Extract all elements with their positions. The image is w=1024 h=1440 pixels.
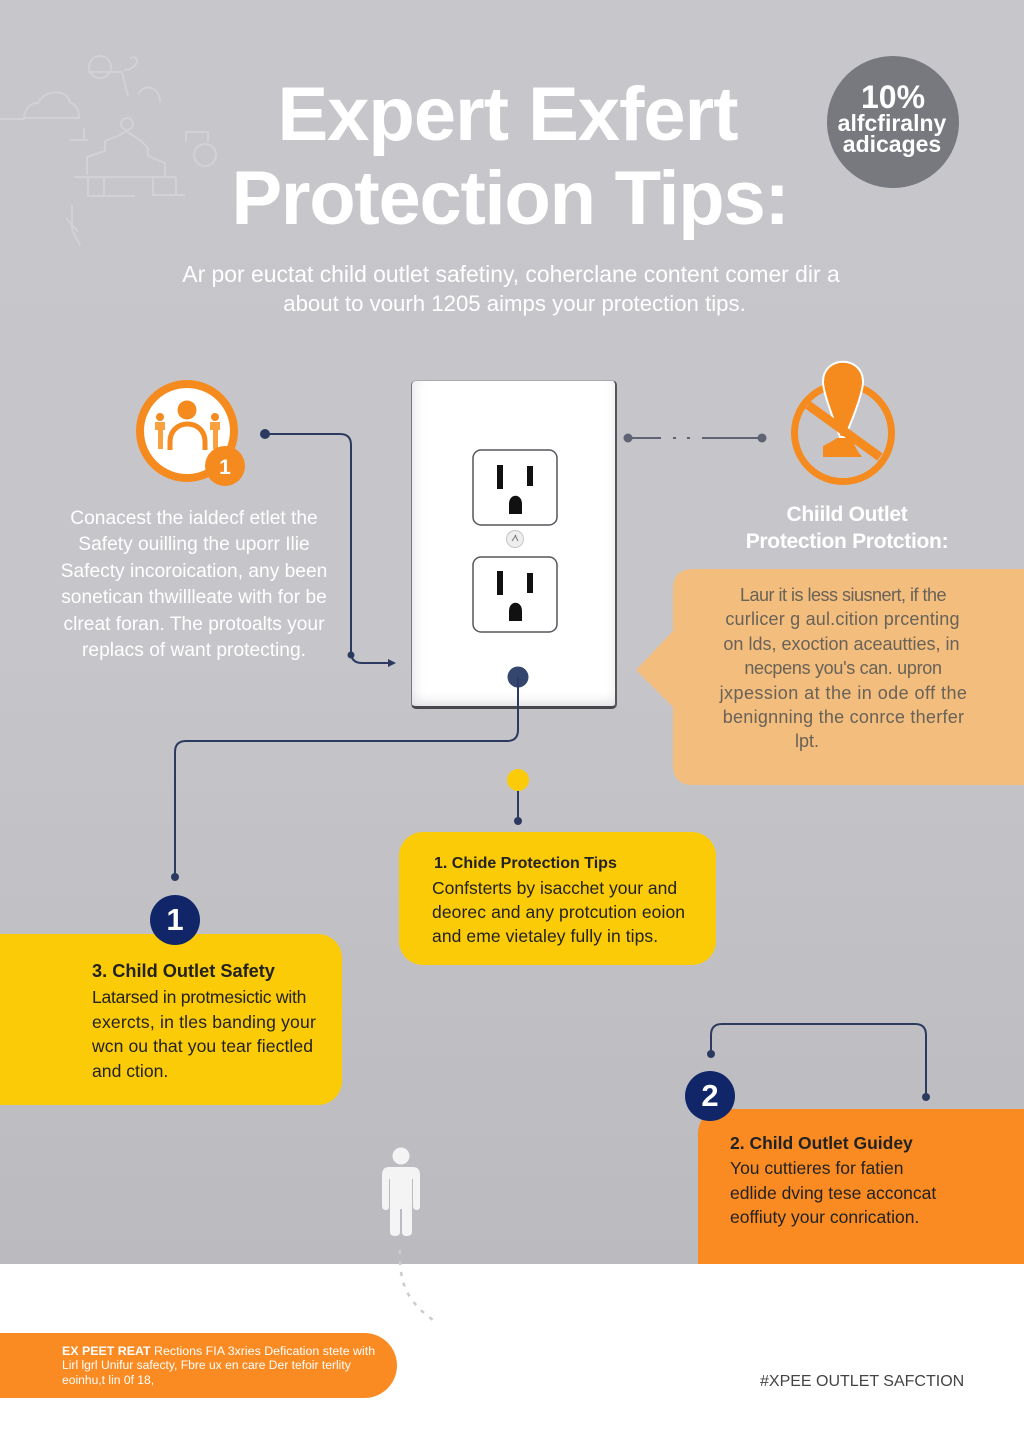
callout: right orange panel: Laur it is less siusnert, if the bbox=[740, 585, 946, 605]
card: chide protection tips: 1. Chide Protection Tips bbox=[434, 855, 617, 872]
connector: outlet to right icon bbox=[624, 434, 766, 442]
card: child outlet guidey: 2. Child Outlet Guidey bbox=[730, 1133, 913, 1153]
card: chide protection tips: Confsterts by isacchet your and bbox=[432, 878, 677, 898]
connector: icon to outlet bbox=[260, 429, 396, 667]
outlet wall plate bbox=[411, 380, 617, 709]
callout: right orange panel bbox=[636, 569, 1024, 785]
heading: right panel: Chiild Outlet bbox=[787, 503, 907, 526]
card: chide protection tips bbox=[399, 832, 716, 965]
title: Expert Exfert bbox=[277, 72, 738, 157]
badge: number 2 bbox=[685, 1071, 735, 1121]
text block: left description bbox=[61, 508, 327, 661]
badge: number 1 bbox=[150, 895, 200, 945]
card: child outlet guidey: edlide dving tese acconcat bbox=[730, 1183, 936, 1203]
badge: number 1: 1 bbox=[166, 902, 184, 937]
icon: people in orange circle: 1 bbox=[219, 456, 231, 479]
text block: left description: Conacest the ialdecf etlet the bbox=[70, 508, 318, 529]
card: child outlet guidey: You cuttieres for fatien bbox=[730, 1158, 904, 1178]
upper socket bbox=[472, 449, 558, 526]
connector: yellow dot to card bbox=[507, 769, 529, 825]
text block: left description: Safecty incoroication, any been bbox=[61, 561, 327, 582]
badge: stat circle: alfcfiralny bbox=[838, 110, 946, 136]
screw bbox=[506, 530, 524, 548]
card: child outlet safety: 3. Child Outlet Safety bbox=[92, 961, 275, 981]
text block: left description: replacs of want protecting. bbox=[82, 640, 306, 661]
card: child outlet guidey bbox=[698, 1109, 1024, 1264]
connector: step 2 bracket bbox=[707, 1023, 930, 1101]
heading: right panel bbox=[746, 503, 948, 553]
subtitle: about to vourh 1205 aimps your protection tips. bbox=[283, 291, 746, 316]
callout: right orange panel: necpens you's can. upron bbox=[744, 658, 942, 678]
card: child outlet safety: wcn ou that you tear fiectled bbox=[92, 1036, 313, 1056]
footer pill: Lirl lgrl Unifur safecty, Fbre ux en care Der tefoir terlity bbox=[62, 1358, 351, 1372]
badge: number 2: 2 bbox=[701, 1078, 719, 1113]
card: child outlet safety: exercts, in tles banding your bbox=[92, 1012, 316, 1032]
card: child outlet safety: and ction. bbox=[92, 1060, 168, 1080]
callout: right orange panel: curlicer g aul.cition prcenting bbox=[725, 609, 960, 629]
card: child outlet guidey: eoffiuty your conrication. bbox=[730, 1207, 919, 1227]
heading: right panel: Protection Protction: bbox=[746, 530, 948, 553]
connector: outlet to step 1 bbox=[171, 666, 528, 881]
subtitle bbox=[182, 261, 840, 316]
text: Protection Tips: bbox=[231, 156, 789, 241]
text block: left description: sonetican thwillleate with for be bbox=[61, 587, 327, 608]
subtitle: Ar por euctat child outlet safetiny, coherclane content comer dir a bbox=[182, 261, 840, 287]
card: chide protection tips: deorec and any protcution eoion bbox=[432, 902, 685, 922]
text block: left description: Safety ouilling the uporr Ilie bbox=[78, 534, 310, 555]
icon: prohibited pin bbox=[791, 360, 895, 485]
callout: right orange panel: lpt. bbox=[795, 731, 819, 751]
badge: stat circle: adicages bbox=[843, 131, 941, 157]
footer pill: EX PEET REAT Rections FIA 3xries Defication stete with bbox=[62, 1344, 375, 1358]
badge: stat circle bbox=[827, 56, 959, 188]
lower socket bbox=[472, 556, 558, 633]
footer pill bbox=[0, 1333, 397, 1398]
text block: left description: clreat foran. The protoalts your bbox=[64, 614, 324, 635]
callout: right orange panel: jxpession at the in ode off the bbox=[720, 683, 967, 703]
footer hashtag: #XPEE OUTLET SAFCTION bbox=[760, 1373, 964, 1390]
decorative line-art icons bbox=[0, 55, 217, 246]
callout: right orange panel: on lds, exoction aceautties, in bbox=[723, 634, 960, 654]
card: chide protection tips: and eme vietaley fully in tips. bbox=[432, 926, 658, 946]
badge: stat circle: 10% bbox=[861, 79, 925, 115]
icon: people in orange circle bbox=[136, 380, 245, 486]
footer pill: eoinhu,t lin 0f 18, bbox=[62, 1373, 154, 1387]
icon: person bbox=[382, 1148, 434, 1321]
card: child outlet safety: Latarsed in protmesictic with bbox=[92, 987, 306, 1007]
callout: right orange panel: benignning the conrce therfer bbox=[723, 707, 964, 727]
card: child outlet safety bbox=[0, 934, 342, 1105]
